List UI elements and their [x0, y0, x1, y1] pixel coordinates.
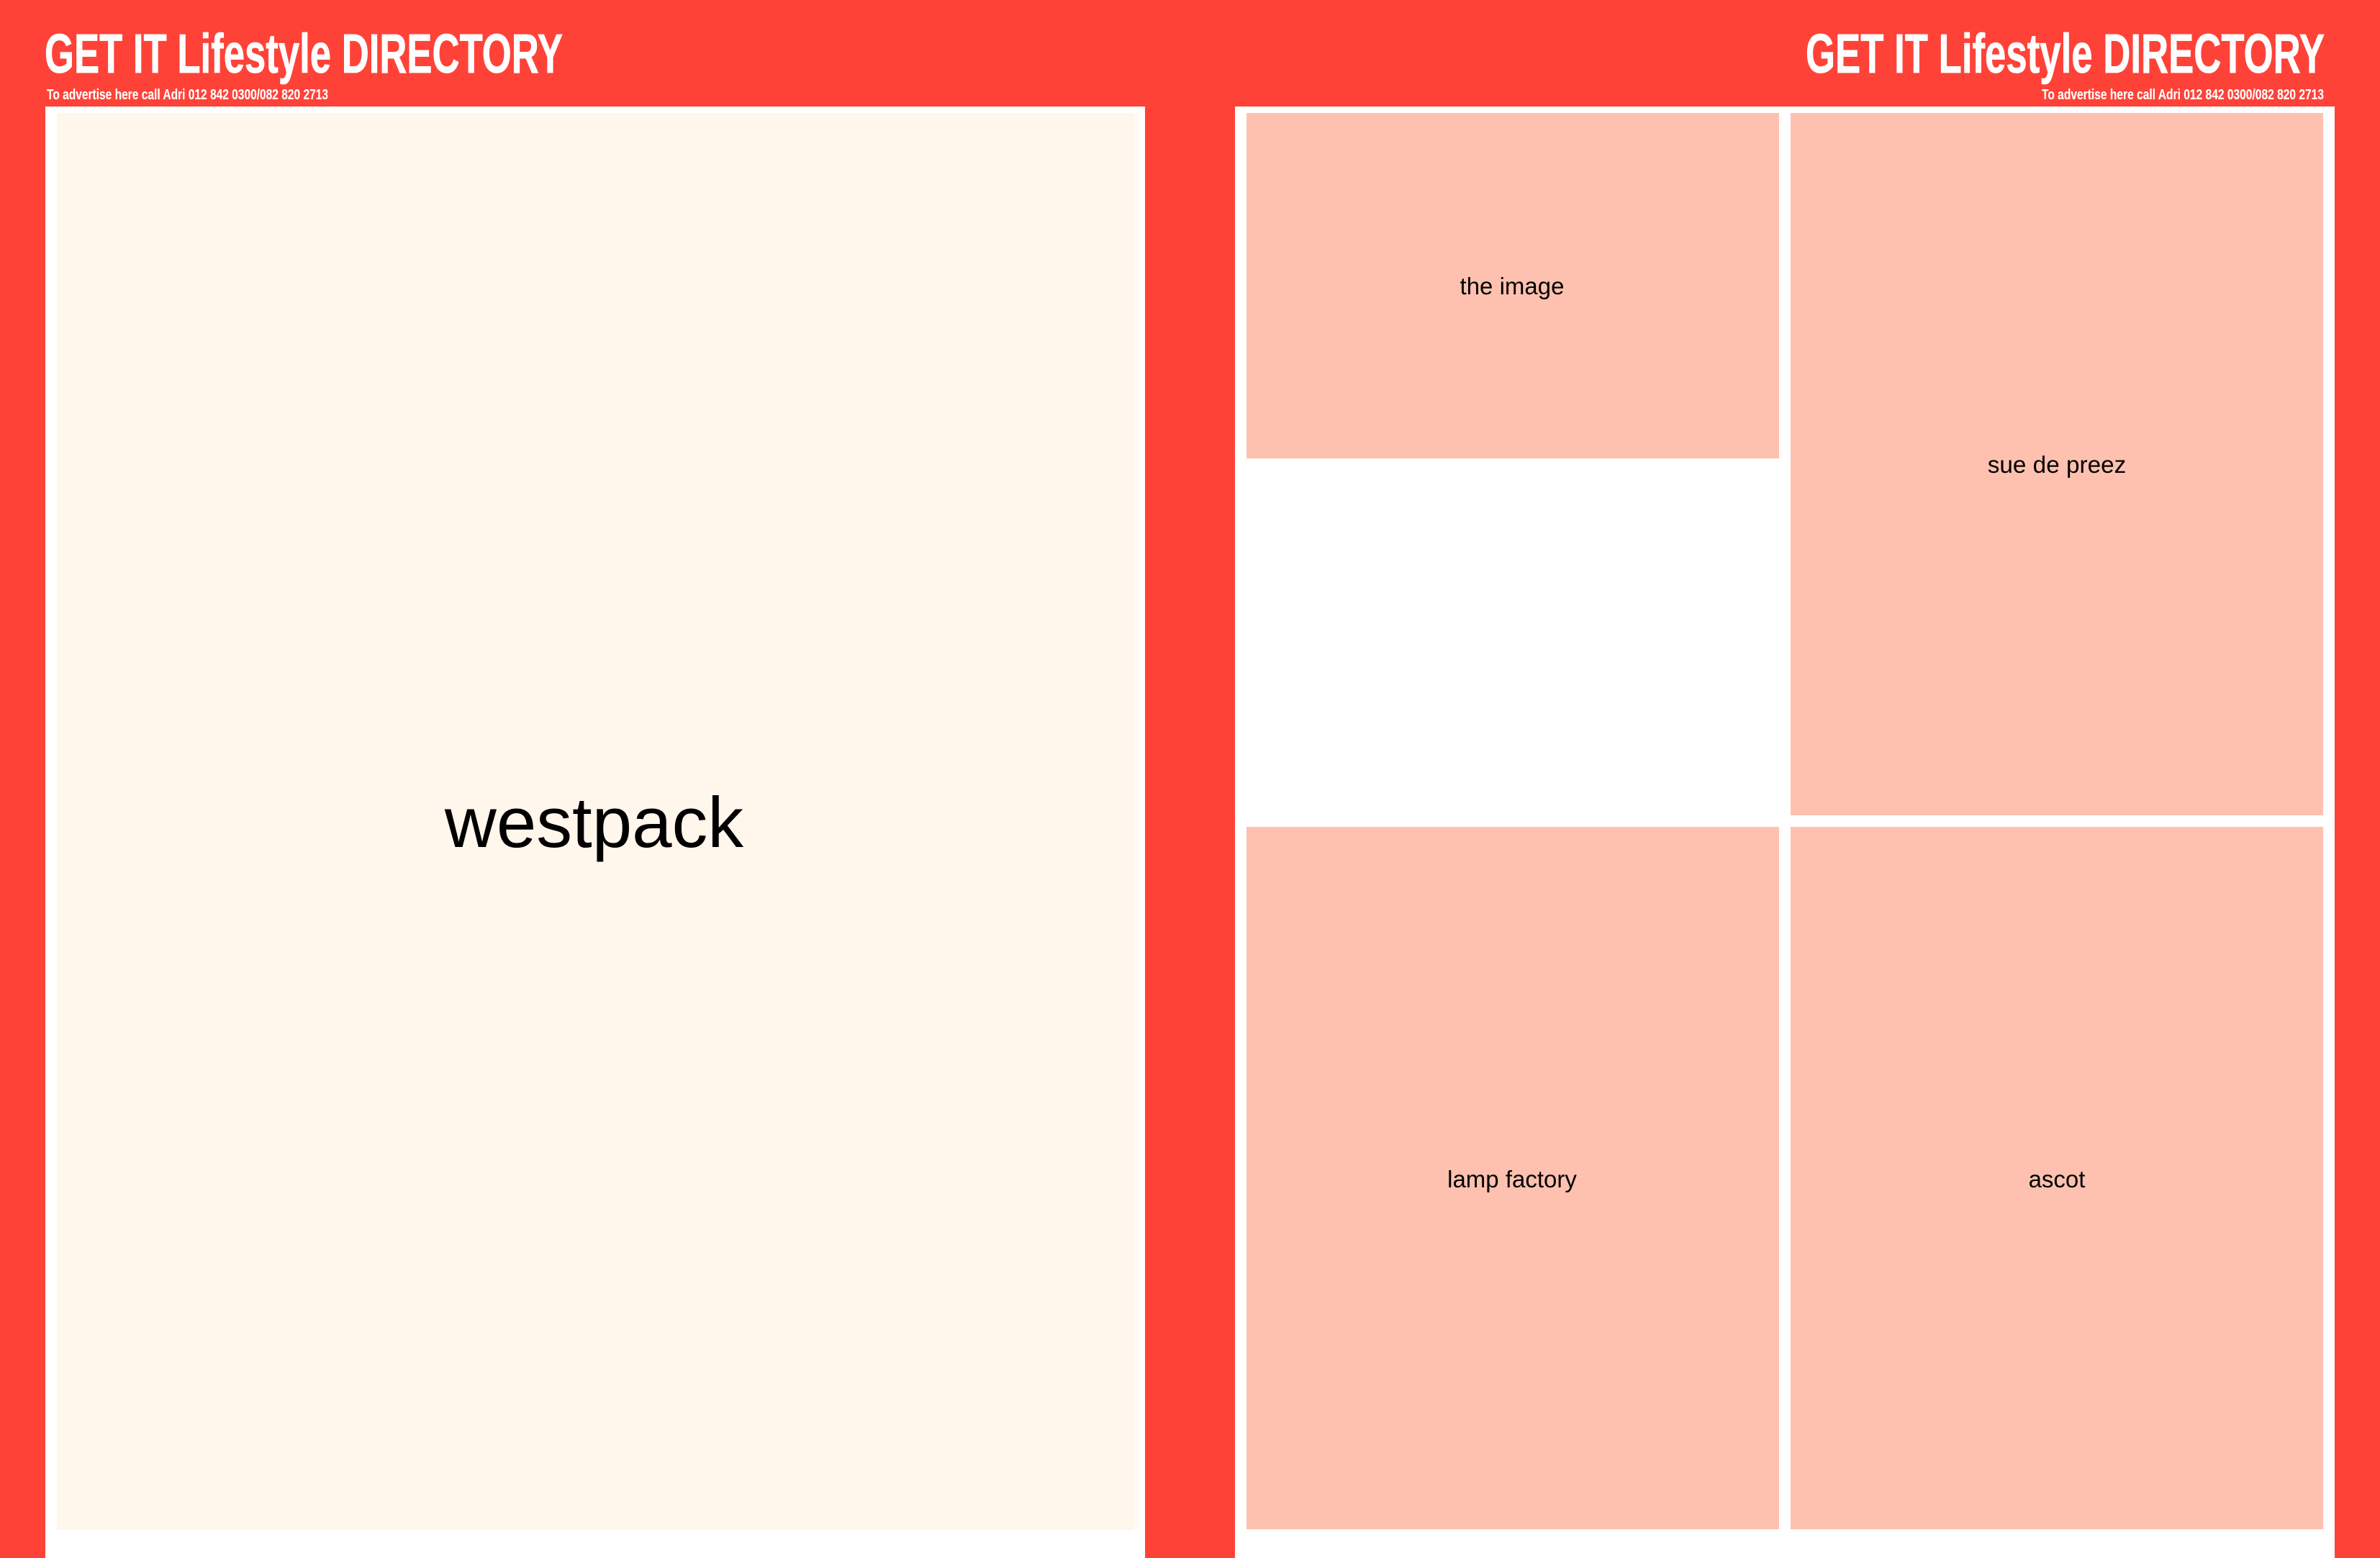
the image label: the image — [1460, 273, 1564, 299]
right page panel — [1235, 107, 2335, 1558]
sue de preez label: sue de preez — [1988, 452, 2126, 479]
left page title: GET IT Lifestyle DIRECTORY — [45, 23, 563, 85]
the image advert block — [1246, 113, 1779, 458]
westpack label: westpack — [444, 783, 743, 863]
right page header — [1806, 23, 2325, 103]
lamp factory advert block — [1246, 827, 1779, 1529]
ascot advert block — [1791, 827, 2323, 1529]
left page header — [45, 23, 563, 103]
lamp factory label: lamp factory — [1447, 1166, 1577, 1192]
sue de preez advert block — [1791, 113, 2323, 815]
left page advertising line: To advertise here call Adri 012 842 0300/082 820 2713 — [47, 87, 328, 103]
ascot label: ascot — [2029, 1166, 2085, 1192]
left page panel — [45, 107, 1145, 1558]
